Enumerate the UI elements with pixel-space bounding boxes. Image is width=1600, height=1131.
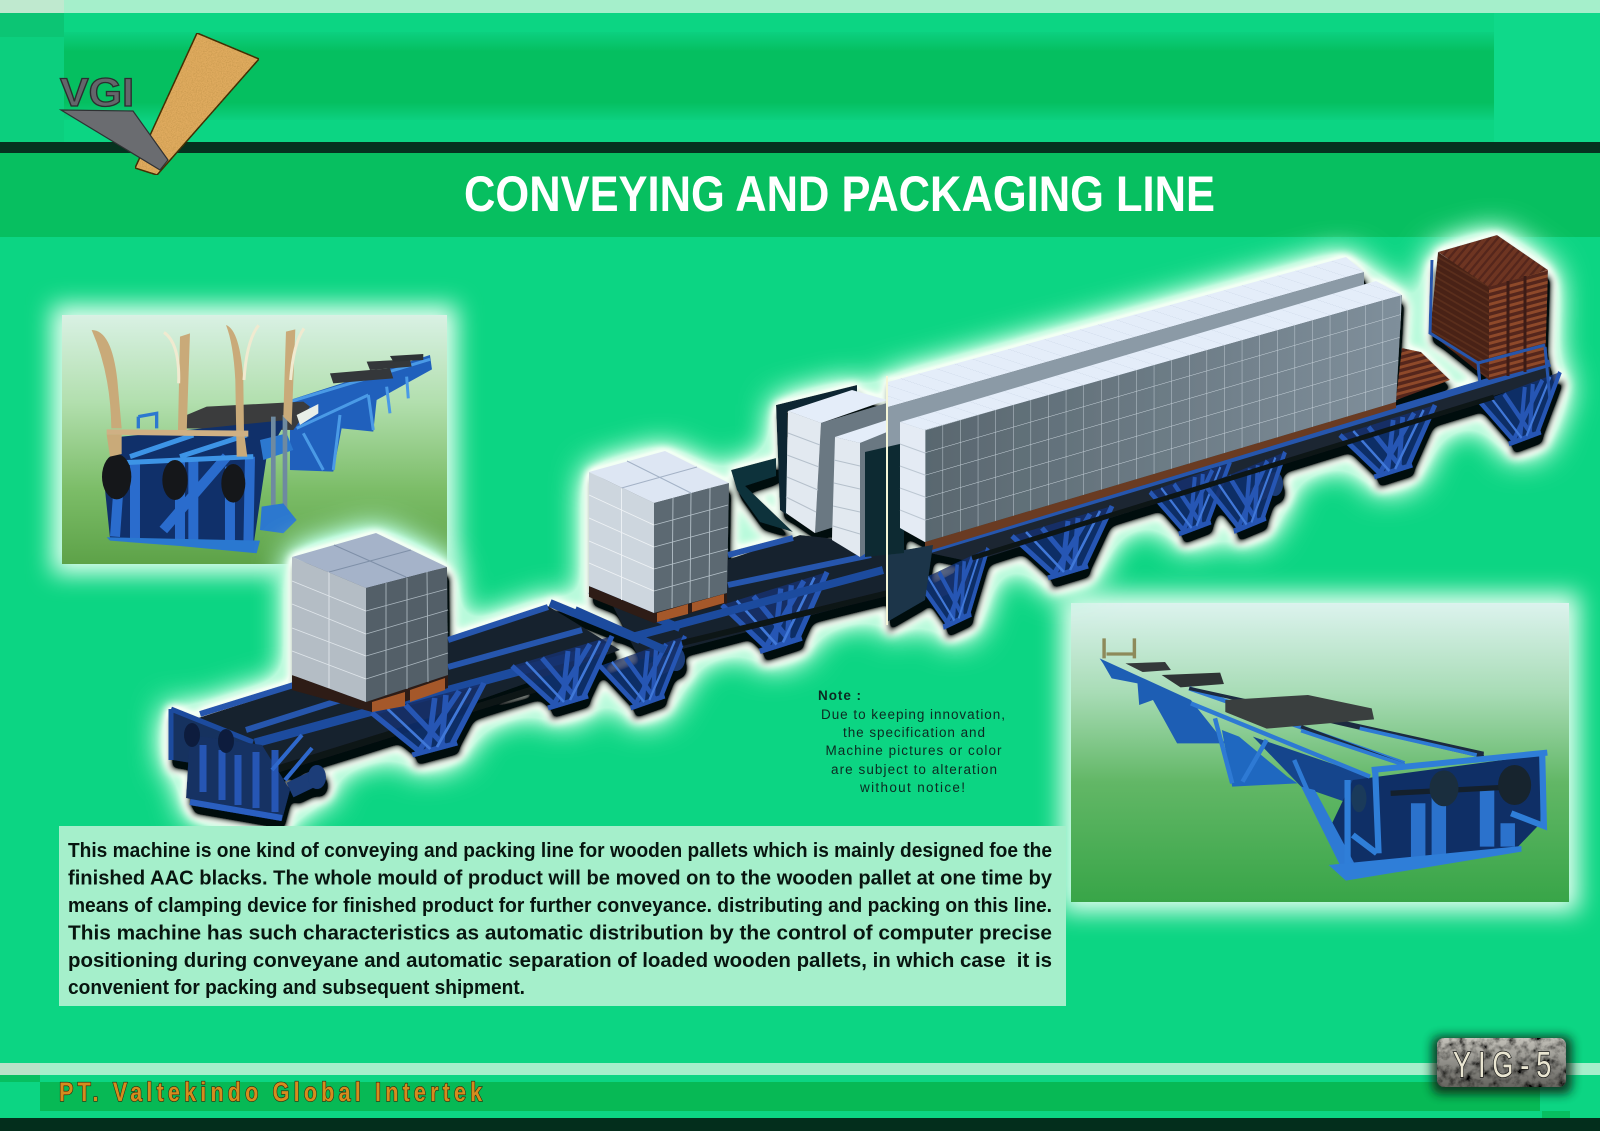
conveyor section 2 connection (550, 538, 888, 650)
photo inset: clamping machine (52, 305, 457, 574)
title band (0, 153, 1600, 237)
company name: PT. Valtekindo Global Intertek (59, 1078, 483, 1108)
description text: positioning during conveyane and automatic separation of loaded wooden pallets, in which case it is (68, 950, 1052, 972)
note body: are subject to alteration (831, 762, 997, 777)
note text (818, 688, 1005, 795)
note body: Due to keeping innovation, (821, 707, 1005, 722)
pallet under rear cube (589, 586, 727, 623)
conveyor photo drawing (1100, 638, 1547, 881)
back long block stack (888, 257, 1364, 470)
description text: This machine has such characteristics as automatic distribution by the control of computer precise (68, 922, 1052, 944)
title: CONVEYING AND PACKAGING LINE (464, 166, 1215, 222)
footer band (0, 1063, 1600, 1131)
rear block cube (589, 451, 729, 613)
conveyor section 3 rails (887, 363, 1550, 622)
conveyor end drive assembly (184, 723, 312, 820)
model badge (1432, 1036, 1572, 1094)
description text: means of clamping device for finished product for further conveyance. distributing and packing on this line. (68, 895, 1052, 917)
conveyor bed underlay (198, 363, 1550, 776)
photo inset: conveyor line (1061, 593, 1579, 912)
note body: the specification and (843, 725, 985, 740)
logo: VGI check mark (60, 33, 259, 175)
main illustration: conveying line with block stacks (171, 235, 1560, 820)
conveyor section 1 rails and end frame (171, 607, 607, 773)
white seam line (886, 376, 888, 625)
header frame band (0, 0, 1600, 153)
machine photo drawing (92, 325, 432, 553)
dark clamp post (865, 443, 904, 557)
motors (290, 472, 1283, 790)
description text: finished AAC blacks. The whole mould of product will be moved on to the wooden pallet at one time by (68, 868, 1053, 890)
logo orange wedge (135, 33, 259, 175)
note body: without notice! (859, 780, 965, 795)
trusses (372, 372, 1560, 755)
short block stack A (786, 390, 887, 533)
description text: convenient for packing and subsequent shipment. (68, 977, 525, 999)
wood pallets lying on conveyor (1396, 348, 1450, 400)
note body: Machine pictures or color (826, 743, 1002, 758)
description panel (59, 826, 1066, 1006)
badge label: YIG-5 (1453, 1044, 1551, 1085)
logo lettering: VGI (60, 71, 134, 115)
pallet stack at line end (1430, 235, 1550, 400)
description text: This machine is one kind of conveying and packing line for wooden pallets which is mainly designed foe the (68, 840, 1052, 862)
description text (68, 840, 1053, 999)
short block stack B (832, 420, 887, 557)
front long block stack (900, 281, 1402, 542)
note body (821, 707, 1005, 795)
pallet under front cube (292, 675, 448, 712)
front block cube (292, 533, 448, 702)
note heading: Note : (818, 688, 861, 703)
dark frame and tray (731, 385, 857, 532)
logo grey wedge (61, 110, 168, 170)
